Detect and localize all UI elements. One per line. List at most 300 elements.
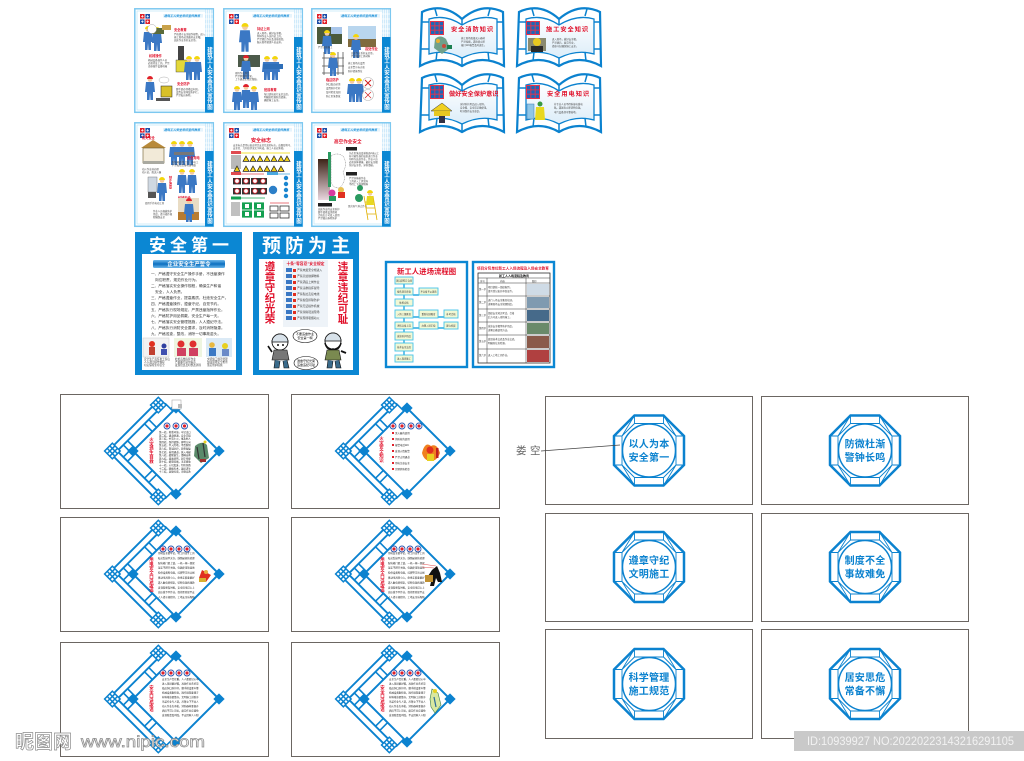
center chart: 严禁未戴安全帽进入 bbox=[297, 268, 322, 272]
book panel: construction safety: 严禁酒后、疲劳作业， bbox=[552, 40, 576, 44]
center chart: 严禁违章指挥冒险 bbox=[297, 286, 320, 290]
poster: new worker flow chart: 办理入场手续 bbox=[422, 324, 436, 328]
table: 进行入场安全教育培训， bbox=[488, 298, 514, 302]
diamond sign: electricity rhymes left: 用电安全口诀歌谣 bbox=[149, 557, 154, 594]
speech bubbles: 安全第一啊 bbox=[297, 335, 313, 340]
diamond sign: fire escape: 第六招，简易防护，蒙鼻匍匐 bbox=[159, 446, 191, 450]
table: 第一步 bbox=[479, 287, 487, 291]
poster: safety first: 严格履行岗位职责 bbox=[175, 360, 196, 364]
poster: safety tips 3: 安全警示标志和 bbox=[348, 65, 365, 69]
book panel: protection awareness bbox=[420, 74, 504, 132]
octagon sign 6: 常备不懈 bbox=[845, 684, 885, 698]
poster: safety tips 2: 确保施工安全。 bbox=[264, 98, 281, 102]
table: 第三步 bbox=[479, 313, 487, 317]
book panel: construction safety bbox=[517, 8, 601, 66]
diamond sign: fire escape: 十三招，身处险境，冷静自救 bbox=[159, 470, 191, 474]
book panel: fire safety: 施工现场配备灭火器材 bbox=[461, 36, 486, 40]
illustration: shocked worker bbox=[422, 564, 442, 586]
poster: safety tips 2: 持证上岗 bbox=[257, 26, 270, 31]
poster: safety education table bbox=[473, 262, 554, 367]
poster: safety first: 企业安全生产誓令 bbox=[167, 260, 211, 268]
poster: working at height bbox=[312, 123, 390, 226]
poster: safety tips 3: 严禁违章施工 bbox=[318, 45, 333, 49]
octagon sign 2 bbox=[830, 416, 900, 486]
poster: new worker flow chart: 建立档案 bbox=[446, 324, 456, 328]
poster: safety first: 八、严格执行消防安全要求，及时消除隐患。 bbox=[151, 325, 225, 330]
frame: diamond 1 bbox=[60, 394, 268, 508]
poster: safety first: 四、严格遵章操作，遵章守纪，自觉节约。 bbox=[151, 301, 221, 306]
octagon sign 6 bbox=[830, 649, 900, 719]
frame: diamond 6 bbox=[292, 642, 500, 756]
diamond sign: electricity rhymes left: 发现隐患及时报，安全用电记心上 bbox=[158, 585, 195, 589]
diamond sign: fire knowledge: 灭火器的使用 bbox=[395, 431, 410, 435]
poster: safety tips 1: 高处作业系好安全带。 bbox=[174, 38, 198, 42]
poster: safety tips 1: 违章操作设备机械 bbox=[148, 64, 168, 68]
diamond sign: electricity rhymes right: 湿手不把开关碰，电器使用须接地 bbox=[388, 566, 425, 570]
poster: safety tips 2: 服从现场管理人员安排。 bbox=[257, 40, 283, 44]
poster: safety first: 九、严格巡查，整改，消除一切事故苗头。 bbox=[151, 331, 221, 336]
frame: octagon 3 bbox=[546, 514, 752, 622]
poster: safety tips 2: 建筑工人安全常识宣传图 bbox=[295, 46, 302, 111]
poster: safety tips 3: 防止坠落事故 bbox=[326, 94, 341, 98]
diamond sign: fire knowledge: 严禁占用通道 bbox=[395, 455, 410, 459]
poster: working at height: 凡在坠落高度基准面2米以上 bbox=[349, 151, 380, 155]
center chart: 严禁酒后上岗作业 bbox=[297, 280, 320, 284]
poster: working at height: 建筑工人安全常识宣传图 bbox=[383, 160, 390, 225]
diamond sign: safety rhymes left: 吊装作业专人管，吊臂之下不站人 bbox=[162, 700, 199, 704]
poster: safety first: 切实保障生命安全 bbox=[144, 363, 165, 367]
poster: safety tips 1: 安全教育 bbox=[174, 27, 188, 32]
table bbox=[478, 273, 550, 363]
octagon sign 3: 文明施工 bbox=[629, 568, 669, 580]
diamond sign: fire escape: 第八招，缓降逃生，滑绳自救 bbox=[159, 453, 191, 457]
poster: safety tips 2: 每日班前进行安全交底， bbox=[264, 92, 290, 96]
poster: safety signs: 建筑工人安全常识宣传图 bbox=[295, 160, 302, 225]
frame: diamond 4 bbox=[292, 518, 500, 632]
diamond sign: fire escape: 十二招，跳楼有术，虽损求生 bbox=[159, 466, 191, 470]
watermark: site: 昵图网 bbox=[15, 731, 72, 753]
table: 内容 bbox=[500, 279, 505, 283]
poster: working at height: 严禁穿拖鞋作业 bbox=[349, 176, 366, 180]
poster: safety tips 1 bbox=[135, 9, 214, 112]
poster: safety tips 3: 洞口临边必须 bbox=[326, 82, 341, 86]
book panel: protection awareness: 安全帽、安全带正确使用， bbox=[460, 106, 489, 110]
diamond sign: electricity rhymes left: 用电安全要牢记，电工持证才上岗 bbox=[158, 551, 195, 555]
center chart bbox=[283, 260, 328, 327]
table: 填写登记表并审查证件。 bbox=[488, 289, 514, 293]
title: 新工人进场流程图 bbox=[397, 267, 456, 276]
poster: prevention first bbox=[253, 232, 359, 375]
book panel: construction safety: 施工安全知识 bbox=[546, 26, 589, 34]
octagon sign 3 bbox=[614, 532, 684, 602]
poster: safety first: 安全生产责任重于泰山 bbox=[144, 357, 170, 361]
diamond sign: safety rhymes right: 吊装作业专人管，吊臂之下不站人 bbox=[389, 700, 426, 704]
speech bubbles: 遵章守纪光荣 bbox=[297, 358, 315, 363]
frame: octagon 5 bbox=[546, 630, 752, 738]
poster: safety signs: 建筑工人安全常识宣传教育 bbox=[253, 128, 290, 132]
diamond sign: fire escape: 火灾逃生自救 bbox=[149, 437, 154, 465]
poster: safety first: 加强现场安全检查 bbox=[207, 360, 228, 364]
book panel: fire safety: 拨打119报警及时逃生。 bbox=[461, 43, 486, 47]
table: 第四步 bbox=[479, 326, 487, 330]
diamond sign: safety rhymes right: 进入现场戴好帽，高处作业系好带 bbox=[389, 682, 426, 686]
poster: safety tips 1: 机械操作 bbox=[149, 53, 163, 58]
diamond sign: safety rhymes right: 动火作业先审批，消防器材要备齐 bbox=[389, 704, 426, 708]
center chart: 严禁擅自拆除防护 bbox=[297, 298, 320, 302]
poster: safety tips 3: 设置防护栏杆 bbox=[326, 86, 341, 90]
diamond sign: fire escape: 第七招，善用通道，莫入电梯 bbox=[159, 450, 191, 454]
poster: safety tips 1: 安全防护 bbox=[177, 81, 190, 86]
book panel: fire safety bbox=[420, 8, 504, 66]
illustration: electric worker bbox=[199, 570, 211, 582]
diamond sign: electricity rhymes right: 高压线下不作业，保持距离保平安 bbox=[388, 590, 425, 594]
center chart: 严禁高处抛掷物料 bbox=[297, 274, 320, 278]
diamond sign: electricity rhymes left: 移动电具须小心，绝缘手套要戴好 bbox=[158, 576, 195, 580]
cartoon worker left bbox=[268, 334, 289, 368]
poster: safety first: 六、严格防护用品佩戴，安全生产每一天。 bbox=[151, 313, 221, 318]
poster: working at height: 高空作业安全 bbox=[334, 138, 362, 145]
poster: safety tips 2: 严禁攀爬脚手架， bbox=[235, 74, 254, 78]
poster: working at height: 严禁擅自拆除防护 bbox=[318, 216, 338, 220]
diamond sign: fire escape: 第一招，熟悉环境，牢记出口 bbox=[159, 430, 191, 434]
watermark: site: www.nipic.com bbox=[80, 734, 205, 751]
center chart: 严禁现场吸烟动火 bbox=[297, 316, 320, 320]
poster: safety tips 4: 程确保安全 bbox=[153, 215, 166, 219]
heading: 安全第一 bbox=[149, 235, 233, 255]
illustration: firefighting bbox=[434, 36, 452, 54]
poster: new worker flow chart: 进入现场施工 bbox=[397, 356, 412, 360]
poster: safety tips 4: 作业人员佩戴防护 bbox=[153, 209, 173, 213]
poster: safety tips 2: 严禁酒后作业及违章指挥， bbox=[257, 37, 286, 41]
poster: safety tips 1: 设置安全网及防护栏， bbox=[176, 90, 200, 94]
poster: safety first: 安全，人人负责。 bbox=[155, 289, 184, 294]
diamond sign: electricity rhymes left bbox=[105, 514, 225, 634]
book panel: electricity safety: 安全用电知识 bbox=[547, 90, 590, 98]
speech bubbles: 不要违章作业 bbox=[296, 331, 314, 336]
frame: octagon 4 bbox=[762, 514, 968, 622]
poster: safety first: 五、严格执行现场规定，严禁违章指挥作业。 bbox=[151, 307, 225, 312]
book panel: protection awareness: 做好安全保护意识 bbox=[449, 90, 498, 98]
poster: working at height: 有可能坠落的高处进行作业 bbox=[349, 154, 378, 158]
poster: new worker flow chart: 发放防护用品 bbox=[397, 334, 412, 338]
watermark: id box bbox=[794, 731, 1024, 751]
poster: safety tips 3: 临边防护 bbox=[326, 77, 339, 82]
diamond sign: safety rhymes left: 酒后不可上岗位，疲劳作业应避免 bbox=[162, 708, 199, 712]
center chart: 严禁私拉乱接电线 bbox=[297, 292, 320, 296]
book panel: fire safety: 安全消防知识 bbox=[451, 26, 494, 34]
diamond sign: fire escape: 第十招，缓晃轻抛，寻求援助 bbox=[159, 460, 191, 464]
illustration: extinguisher bbox=[422, 445, 440, 461]
table: 讲解现场安全管理制度。 bbox=[488, 302, 514, 306]
diamond sign: safety rhymes left: 临边洞口防护好，脚手搭设要牢靠 bbox=[162, 686, 199, 690]
poster: safety first: 杜绝违章指挥作业 bbox=[175, 357, 196, 361]
center chart: 严禁穿拖鞋进现场 bbox=[297, 310, 320, 314]
poster: working at height: 建筑工人安全常识宣传教育 bbox=[341, 128, 378, 132]
table: 新工人入场流程及教育 bbox=[499, 273, 529, 278]
poster: safety first: 落实防护措施 bbox=[207, 363, 223, 367]
book panel: protection awareness: 穿好防护用品进入现场， bbox=[460, 102, 486, 106]
watermark: site bbox=[15, 731, 205, 753]
book panel: fire safety: 严禁吸烟，遇险情立即 bbox=[461, 40, 486, 44]
poster: safety tips 2: 建筑工人安全常识宣传教育 bbox=[253, 14, 290, 18]
octagon sign 2: 防微杜渐 bbox=[845, 438, 885, 450]
poster: safety tips 3: 高处作业 bbox=[365, 46, 379, 51]
frame: diamond 5 bbox=[60, 642, 268, 756]
octagon sign 6: 居安思危 bbox=[845, 671, 885, 684]
poster: safety tips 2: 进入现场，戴好安全帽， bbox=[257, 31, 283, 35]
poster: working at height: 工具放入工具袋内 bbox=[349, 179, 369, 183]
poster: safety tips 4: 配电箱必须上锁，非电工 bbox=[172, 160, 199, 164]
poster: safety tips 3: 高处作业系好安全带， bbox=[351, 51, 375, 55]
poster: safety tips 3: 建筑工人安全常识宣传教育 bbox=[341, 14, 378, 18]
diamond sign: safety rhymes right: 安全生产责任重，人人都要记心中 bbox=[389, 677, 426, 681]
diamond sign: fire knowledge: 报警电话119 bbox=[395, 443, 409, 447]
table: 讲解正确使用方法。 bbox=[488, 328, 510, 332]
octagon sign 5: 科学管理 bbox=[629, 671, 669, 684]
poster: new worker flow chart: 补考合格 bbox=[446, 312, 456, 316]
illustration: workers bbox=[528, 38, 546, 52]
diamond sign: electricity rhymes right: 移动电具须小心，绝缘手套要戴好 bbox=[388, 576, 425, 580]
poster: safety signs bbox=[224, 123, 302, 226]
poster: safety tips 2 bbox=[224, 9, 302, 112]
heading: 预防为主 bbox=[262, 234, 354, 257]
illustration: green worker bbox=[430, 689, 441, 713]
frame: octagon 1 bbox=[546, 396, 752, 504]
diamond sign: electricity rhymes left: 配电箱门要上锁，一机一闸一漏保 bbox=[158, 561, 195, 565]
table: 序号 bbox=[480, 279, 485, 283]
poster: new worker flow chart: 体检合格 bbox=[399, 300, 409, 304]
poster: working at height: 不得上下抛掷物料 bbox=[349, 182, 369, 186]
book panel: electricity safety: 非专业人员不得拆接电线电 bbox=[554, 102, 583, 106]
table: 进入工地上岗作业。 bbox=[488, 353, 510, 357]
illustration: umbrella bbox=[431, 103, 452, 123]
frame: octagon 6 bbox=[762, 630, 968, 738]
poster: safety tips 4: 防火安全 bbox=[142, 135, 156, 140]
octagon sign 4: 事故难免 bbox=[845, 568, 885, 580]
poster: working at height: 均称为高处作业，作业人员 bbox=[349, 157, 378, 161]
poster: safety tips 3: 防护措施到位 bbox=[348, 69, 363, 73]
frame: octagon 2 bbox=[762, 396, 968, 504]
poster: safety tips 1: 脚手架必须搭设牢固， bbox=[176, 87, 200, 91]
diamond sign: fire knowledge: 发现火情报警 bbox=[395, 449, 410, 453]
diamond sign: electricity rhymes right: 人人遵守规程好，工地安全乐陶陶 bbox=[388, 595, 425, 599]
diamond sign: electricity rhymes left: 遇人触电莫慌张，切断电源再施救 bbox=[158, 580, 195, 584]
slogan left: 遵章守纪光荣 bbox=[264, 260, 276, 325]
poster: safety tips 2: 上下通道走规定路线。 bbox=[235, 77, 259, 81]
book panel: protection awareness: 时刻保持安全意识。 bbox=[460, 109, 482, 113]
poster: safety tips 3: 施工现场应设置 bbox=[348, 61, 365, 65]
diamond sign: fire knowledge: 火灾安全知识 bbox=[379, 436, 384, 464]
diamond sign: electricity rhymes left: 检修设备断电源，挂牌警示勿合闸 bbox=[158, 571, 195, 575]
poster: safety tips 4: 严禁私拉乱接电线电缆 bbox=[172, 163, 197, 167]
poster: safety signs: 安全色、几何形状或文字构成，施工人员应熟知。 bbox=[233, 146, 286, 150]
poster: new worker flow chart: 入场三级教育 bbox=[397, 312, 412, 316]
diamond sign: safety rhymes left: 动火作业先审批，消防器材要备齐 bbox=[162, 704, 199, 708]
poster: safety first: 文明施工规范管理 bbox=[207, 357, 228, 361]
diamond sign: electricity rhymes right: 用电安全要牢记，电工持证才上岗 bbox=[388, 551, 425, 555]
octagon sign 4 bbox=[830, 532, 900, 602]
connectors bbox=[404, 280, 444, 360]
octagon sign 3: 遵章守纪 bbox=[629, 554, 669, 567]
diamond sign: electricity rhymes left: 私拉乱接不允许，线路破损快修理 bbox=[158, 556, 195, 560]
poster: safety signs: 安全标志 bbox=[251, 137, 271, 144]
poster: working at height: 恶劣天气停止作业 bbox=[348, 204, 368, 208]
table: 图示 bbox=[532, 279, 537, 283]
diamond sign: safety rhymes right: 材料堆放要整齐，文明施工讲秩序 bbox=[389, 695, 426, 699]
frame: diamond 3 bbox=[60, 518, 268, 632]
poster: safety tips 4: 用品，遵守操作规 bbox=[153, 212, 173, 216]
poster: safety tips 4: 动火作业前办理 bbox=[142, 167, 159, 171]
poster: safety tips 4 bbox=[135, 123, 214, 226]
poster: safety first: 三、严格遵章作业，提高素质，杜绝安全生产。 bbox=[151, 295, 228, 300]
table: 组织安全知识考试，合格 bbox=[488, 311, 515, 315]
poster: safety tips 1: 严禁私自拆除。 bbox=[176, 93, 193, 97]
poster: new worker flow chart: 项目部签订合同 bbox=[396, 278, 413, 282]
poster: safety tips 4: 禁止违章 bbox=[168, 175, 172, 189]
poster: safety first: 岗位职责，规范作业行为。 bbox=[155, 277, 199, 282]
diamond sign: fire escape: 十一招，火已及身，切勿惊跑 bbox=[159, 463, 191, 467]
poster: safety tips 2: 明确危险源防范措施， bbox=[264, 95, 288, 99]
poster: safety tips 1: 严格遵守安全操作规程，进入 bbox=[174, 32, 206, 36]
poster: new worker flow chart: 考核合格上岗 bbox=[397, 324, 412, 328]
poster: safety first: 二、严格落实安全操作规程，确保生产和谐 bbox=[151, 283, 221, 288]
diamond sign: fire knowledge bbox=[336, 391, 456, 511]
poster: working at height: 高处作业的安全防护 bbox=[318, 207, 340, 211]
diamond sign: electricity rhymes right: 用电安全口诀歌谣 bbox=[380, 557, 386, 594]
diamond sign: safety rhymes left: 机械设备勤检查，操作规程要遵守 bbox=[162, 690, 199, 694]
table: 第五步 bbox=[479, 339, 487, 343]
diamond sign: fire escape: 第二招，通道畅通，安全无阻 bbox=[159, 433, 191, 437]
poster: safety first: 发现隐患及时整改消除 bbox=[175, 363, 201, 367]
diamond sign: electricity rhymes right: 配电箱门要上锁，一机一闸一漏保 bbox=[388, 561, 425, 565]
diamond sign: electricity rhymes right: 遇人触电莫慌张，切断电源再施救 bbox=[388, 580, 425, 584]
poster: safety first: 一、严格遵守安全生产操作手册，不违章操作 bbox=[151, 271, 225, 276]
octagon sign 1: 以人为本 bbox=[629, 438, 669, 450]
center chart: 十条“零容忍”安全规定 bbox=[287, 261, 325, 266]
photo cards bbox=[143, 338, 232, 357]
poster: working at height: 必须身体健康，戴好安全帽 bbox=[349, 160, 378, 164]
octagon sign 1: 安全第一 bbox=[629, 451, 669, 464]
diamond sign: fire knowledge: 定期消防检查 bbox=[395, 467, 410, 471]
slogan right: 违章违纪可耻 bbox=[336, 261, 348, 325]
frame: diamond 2 bbox=[292, 394, 500, 508]
diamond sign: electricity rhymes right: 发现隐患及时报，安全用电记心上 bbox=[388, 585, 425, 589]
speech bubbles: 违章违纪可耻 bbox=[297, 362, 315, 367]
book panel: electricity safety bbox=[517, 74, 601, 132]
poster: safety first bbox=[135, 232, 242, 375]
diamond sign: fire knowledge: 消防栓的使用 bbox=[395, 437, 410, 441]
table: 明确岗位危险源。 bbox=[488, 341, 507, 345]
poster: safety tips 3: 严禁抛掷工具材料 bbox=[351, 54, 371, 58]
poster: safety tips 4: 使用手持电动工具 bbox=[145, 201, 165, 205]
diamond sign: safety rhymes left bbox=[105, 639, 225, 759]
octagon sign 5: 施工规范 bbox=[629, 684, 669, 698]
diamond sign: safety rhymes right: 机械设备勤检查，操作规程要遵守 bbox=[389, 690, 426, 694]
poster: working at height: 系好安全带，穿防滑鞋。 bbox=[349, 163, 375, 167]
diamond sign: safety rhymes right: 临边洞口防护好，脚手搭设要牢靠 bbox=[389, 686, 426, 690]
poster: new worker flow chart bbox=[386, 262, 467, 367]
diamond sign: fire escape: 第九招，避难场所，固守待援 bbox=[159, 456, 191, 460]
diamond sign: safety rhymes left: 发现隐患及时改，平安回家人人盼 bbox=[162, 713, 199, 717]
poster: working at height: 合格后方可投入使用 bbox=[318, 213, 340, 217]
poster: safety tips 4: 机械安全 bbox=[178, 195, 192, 200]
poster: safety tips 1: 施工现场必须戴好安全帽， bbox=[174, 35, 203, 39]
diamond sign: safety rhymes left: 材料堆放要整齐，文明施工讲秩序 bbox=[162, 695, 199, 699]
table: 后方可进入现场施工。 bbox=[488, 315, 512, 319]
poster: new worker flow chart: 报名登记审查 bbox=[397, 290, 412, 294]
cartoon worker right bbox=[325, 333, 346, 368]
poster: new worker flow chart: 重新培训教育 bbox=[422, 312, 436, 316]
center chart: 严禁无证操作机械 bbox=[297, 304, 320, 308]
octagon sign 2: 警钟长鸣 bbox=[845, 451, 885, 464]
book panel: construction safety: 进入现场，戴好安全帽， bbox=[552, 37, 578, 41]
book panel: electricity safety: 路，遇漏电立即切断电源， bbox=[554, 106, 583, 110]
diamond sign: electricity rhymes right bbox=[336, 514, 456, 634]
title: 项目分包单位新工人入场流程及入场安全教育 bbox=[477, 266, 549, 270]
speech bubbles bbox=[293, 330, 318, 370]
diamond sign: fire escape bbox=[105, 391, 225, 511]
illustration: fire escape bbox=[194, 440, 209, 463]
poster: safety tips 4: 动火证，配灭火器 bbox=[142, 170, 162, 174]
poster: safety first: 人人遵守操作规程 bbox=[144, 360, 165, 364]
diamond sign: fire escape: 第四招，保持镇静，辨明方向 bbox=[159, 440, 191, 444]
diamond sign: fire escape: 第五招，不入险地，不贪财物 bbox=[159, 443, 191, 447]
octagon sign 4: 制度不全 bbox=[845, 554, 885, 567]
diamond sign: electricity rhymes right: 私拉乱接不允许，线路破损快修理 bbox=[388, 556, 425, 560]
watermark: id box: ID:10939927 NO:20220223143216291105 bbox=[807, 736, 1014, 748]
diamond sign: safety rhymes right: 安全口诀歌谣 bbox=[380, 684, 386, 713]
poster: safety signs: 安全标志是用以表达特定安全信息的标志，由图形符号、 bbox=[233, 143, 293, 147]
diamond sign: safety rhymes right: 发现隐患及时改，平安回家人人盼 bbox=[389, 713, 426, 717]
poster: safety tips 1: 必须持证上岗，严禁 bbox=[148, 61, 170, 65]
diamond sign: safety rhymes left: 安全口诀歌谣 bbox=[149, 684, 154, 713]
book panel: electricity safety: 电气设备须可靠接地。 bbox=[554, 110, 578, 114]
diamond sign: electricity rhymes left: 高压线下不作业，保持距离保平安 bbox=[158, 590, 195, 594]
poster: safety tips 4: 建筑工人安全常识宣传教育 bbox=[164, 128, 201, 132]
poster: safety tips 4: 建筑工人安全常识宣传图 bbox=[206, 160, 213, 225]
table: 项目部统一组织报到， bbox=[488, 285, 512, 289]
diamond sign: safety rhymes left: 安全生产责任重，人人都要记心中 bbox=[162, 677, 199, 681]
poster: safety tips 2: 现场作业规范 bbox=[235, 71, 250, 75]
table: 第二步 bbox=[479, 300, 487, 304]
diamond sign: electricity rhymes left: 湿手不把开关碰，电器使用须接地 bbox=[158, 566, 195, 570]
poster: new worker flow chart: 不合格予以退场 bbox=[420, 290, 437, 294]
callout: hollow-out note bbox=[516, 444, 620, 457]
callout: hollow-out note: 空 bbox=[530, 444, 540, 457]
poster: safety tips 4: 安全用电 bbox=[187, 155, 201, 160]
poster: safety first: 七、严格落实安全管理措施，人人遵纪守法。 bbox=[151, 319, 225, 324]
poster: safety tips 2: 班前教育 bbox=[264, 87, 278, 92]
poster: safety tips 2: 特种作业人员持证上岗， bbox=[257, 34, 283, 38]
diamond sign: safety rhymes left: 进入现场戴好帽，高处作业系好带 bbox=[162, 682, 199, 686]
octagon sign 1 bbox=[614, 416, 684, 486]
octagon sign 5 bbox=[614, 649, 684, 719]
diamond sign: fire knowledge: 用电注意安全 bbox=[395, 461, 410, 465]
table: 第六步 bbox=[479, 353, 487, 357]
poster: safety tips 1: 机械设备操作人员 bbox=[148, 58, 168, 62]
book panel: construction safety: 遵章守纪确保施工安全。 bbox=[552, 44, 578, 48]
poster: safety tips 3 bbox=[312, 9, 390, 112]
diamond sign: electricity rhymes left: 人人遵守规程好，工地安全乐陶陶 bbox=[158, 595, 195, 599]
table: 发放安全帽等防护用品， bbox=[488, 324, 514, 328]
poster: safety tips 1: 建筑工人安全常识宣传教育 bbox=[164, 14, 201, 18]
strip title: 建筑工人安全常识宣传图 bbox=[206, 46, 213, 111]
diamond sign: fire escape: 第三招，扑灭小火，惠及他人 bbox=[159, 437, 191, 441]
diamond sign: safety rhymes right: 酒后不可上岗位，疲劳作业应避免 bbox=[389, 708, 426, 712]
diamond sign: safety rhymes right bbox=[336, 639, 456, 759]
poster: working at height: 脚手架搭设须验收 bbox=[318, 210, 338, 214]
poster: safety tips 3: 及时检查加固 bbox=[326, 90, 341, 94]
